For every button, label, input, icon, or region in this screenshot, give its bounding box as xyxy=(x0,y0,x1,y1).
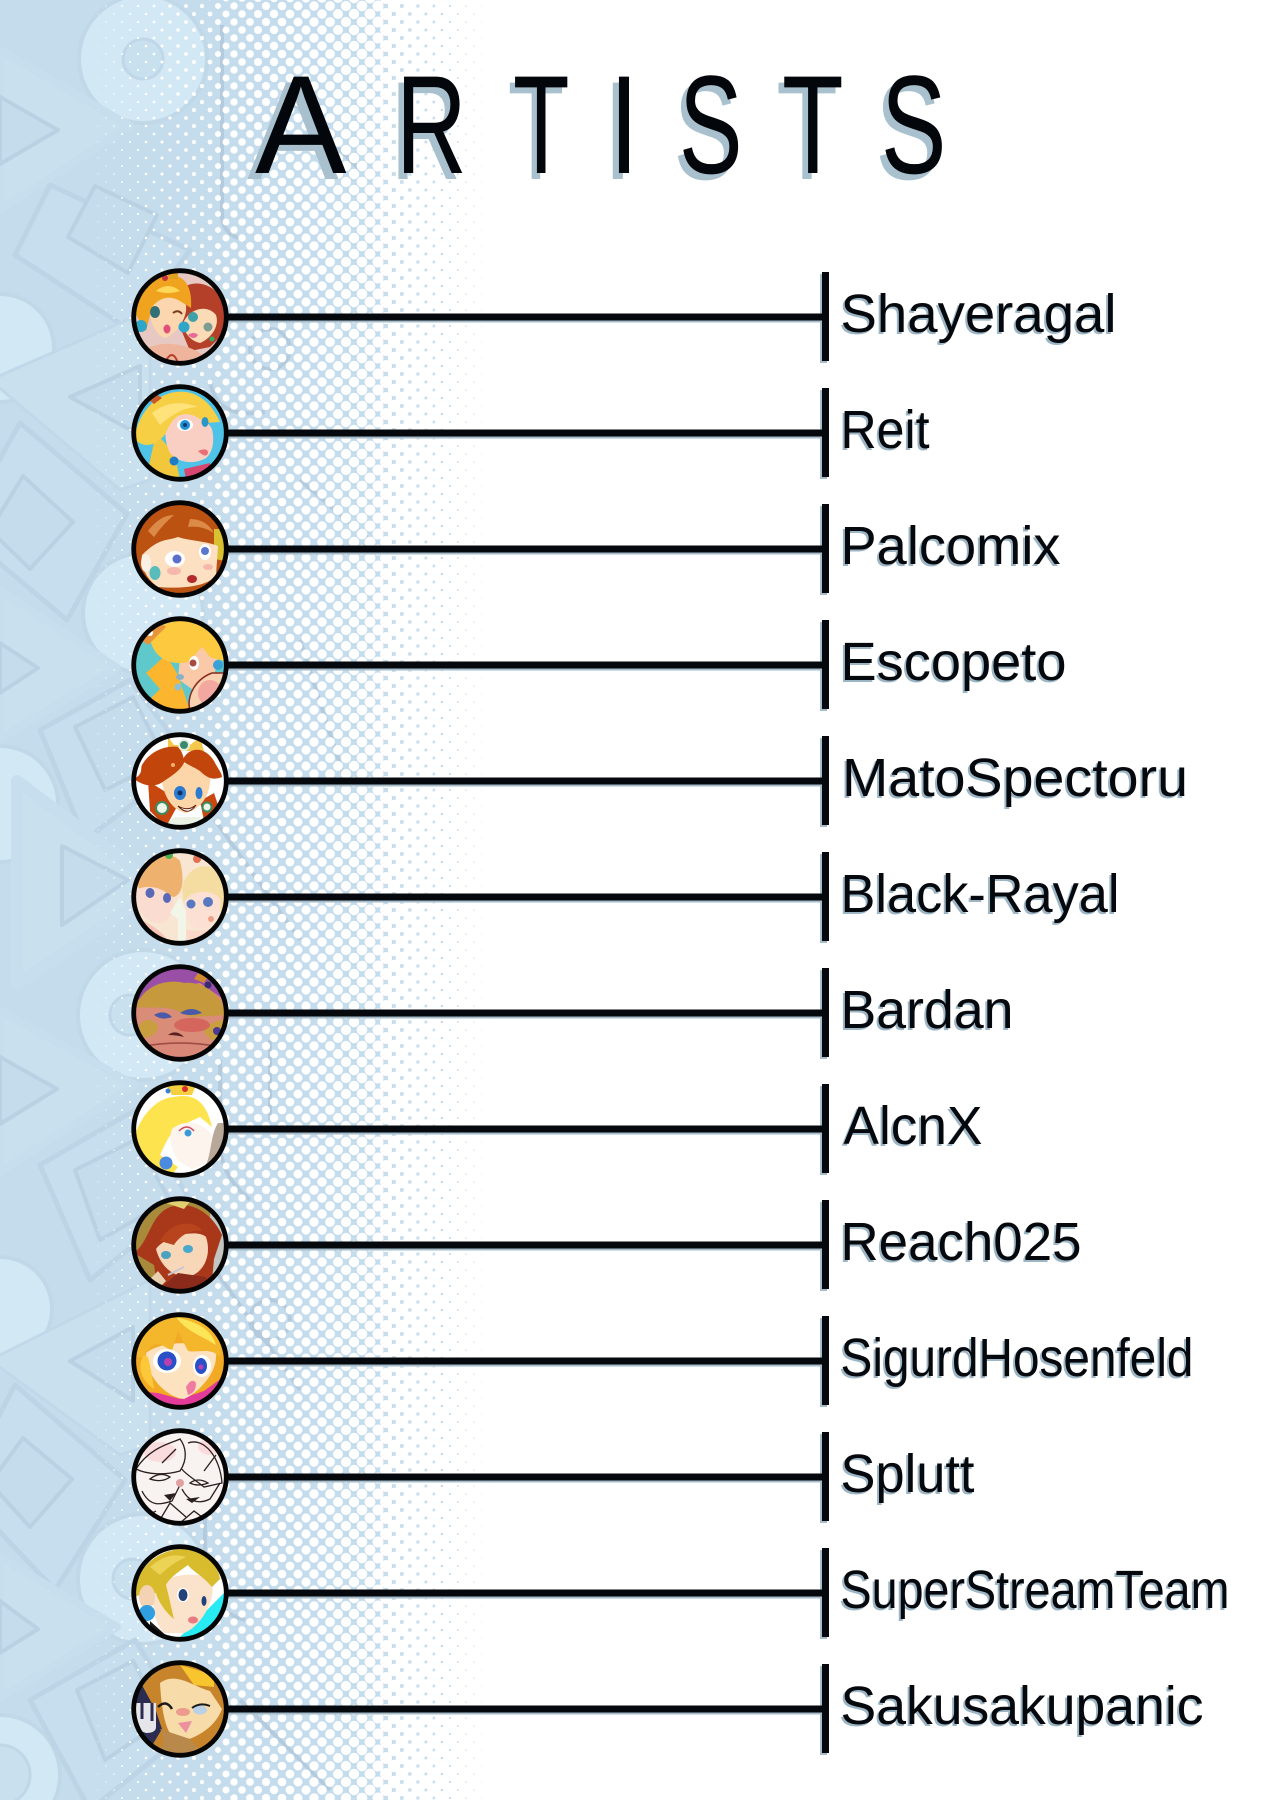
portrait: big-eyed Peach xyxy=(134,1315,226,1407)
portrait: Daisy smiling on white xyxy=(134,735,226,827)
portrait: pastel Daisy and Peach xyxy=(134,851,226,943)
row: Sakusakupanic xyxy=(134,1663,1204,1755)
title: T xyxy=(782,46,844,202)
connector line xyxy=(225,968,829,1057)
connector line xyxy=(225,1432,829,1521)
title: R xyxy=(396,46,467,202)
connector line xyxy=(225,388,829,477)
connector line xyxy=(225,1316,829,1405)
artist name: AlcnX xyxy=(844,1096,982,1156)
title: A xyxy=(255,46,347,202)
artist name: Escopeto xyxy=(840,632,1066,692)
connector line xyxy=(225,852,829,941)
title: I xyxy=(609,46,639,202)
portrait: Peach in yellow xyxy=(134,1083,226,1175)
title xyxy=(248,46,946,202)
portrait: 3D Peach xyxy=(134,1547,226,1639)
title: S xyxy=(881,46,946,202)
artist name: Splutt xyxy=(840,1444,974,1504)
row: AlcnX xyxy=(134,1083,982,1175)
artist name: Bardan xyxy=(840,980,1014,1040)
connector line xyxy=(225,1200,829,1289)
row: Palcomix xyxy=(134,503,1060,595)
portrait: Daisy with red hair xyxy=(134,1199,226,1291)
row: Escopeto xyxy=(134,619,1066,711)
portrait: line art sketch xyxy=(134,1431,226,1523)
portrait: Peach from the side xyxy=(134,619,226,711)
artist name: SigurdHosenfeld xyxy=(840,1328,1194,1388)
connector line xyxy=(225,620,829,709)
background: button shape pattern xyxy=(0,0,370,1800)
row: Shayeragal xyxy=(134,271,1116,363)
row: Black-Rayal xyxy=(134,851,1119,943)
artist name: Black-Rayal xyxy=(840,864,1120,924)
connector line xyxy=(225,504,829,593)
artist name: Reit xyxy=(840,400,930,460)
artist name: Shayeragal xyxy=(840,284,1116,344)
artist name: Sakusakupanic xyxy=(840,1676,1204,1736)
row: Reach025 xyxy=(134,1199,1081,1291)
title: S xyxy=(679,46,743,202)
background: blue base xyxy=(0,0,516,1800)
artist name: SuperStreamTeam xyxy=(840,1560,1230,1620)
row: SuperStreamTeam xyxy=(134,1547,1230,1639)
portrait: winking blonde xyxy=(134,1663,226,1755)
portrait: Peach and Daisy xyxy=(134,271,226,363)
artist name: Palcomix xyxy=(840,516,1060,576)
background: white halftone dots xyxy=(98,0,514,1800)
portrait: Daisy close up xyxy=(134,503,226,595)
row: Splutt xyxy=(134,1431,974,1523)
row: SigurdHosenfeld xyxy=(134,1315,1194,1407)
connector line xyxy=(225,736,829,825)
row: Bardan xyxy=(134,967,1013,1059)
row: MatoSpectoru xyxy=(134,735,1188,827)
connector line xyxy=(225,1084,829,1173)
connector line xyxy=(225,272,829,361)
portrait: blushing blonde xyxy=(134,967,226,1059)
title: T xyxy=(513,46,569,202)
artist name: MatoSpectoru xyxy=(842,748,1188,808)
row: Reit xyxy=(134,387,929,479)
connector line xyxy=(225,1664,829,1753)
portrait: Peach on blue xyxy=(134,387,226,479)
artist name: Reach025 xyxy=(840,1212,1082,1272)
connector line xyxy=(225,1548,829,1637)
